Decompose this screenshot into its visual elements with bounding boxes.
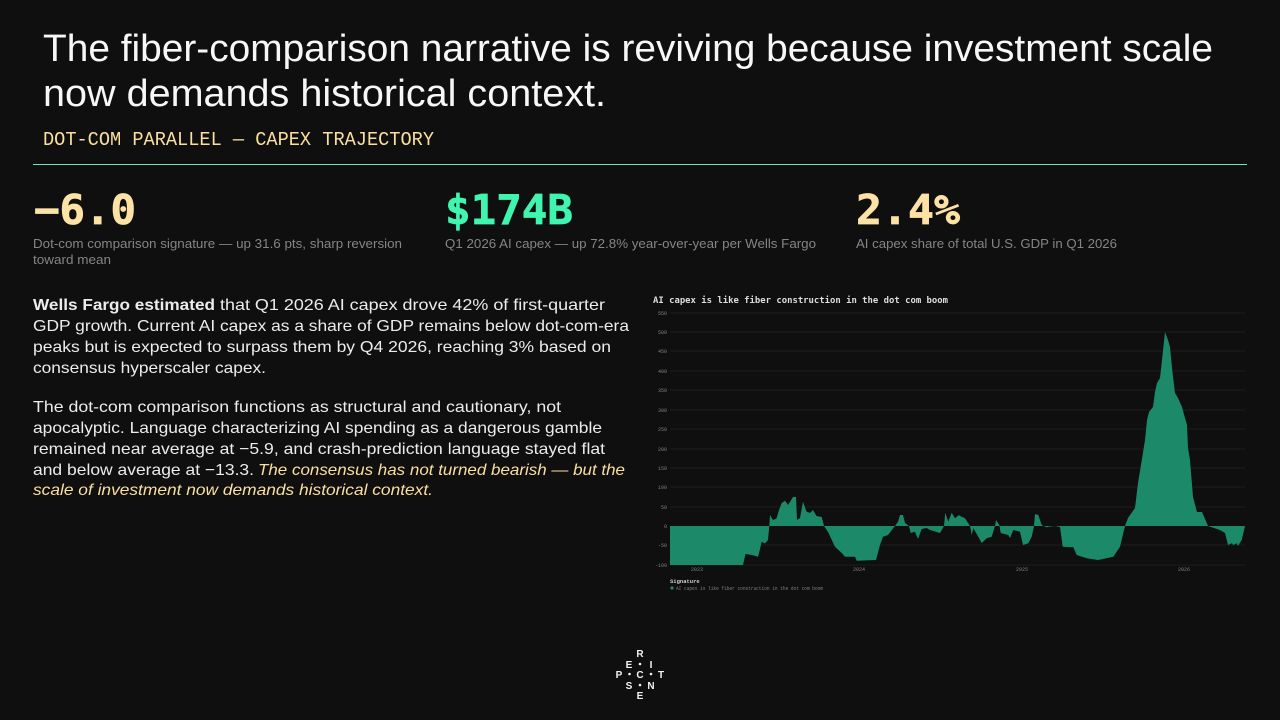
stat: AI capex [445, 186, 816, 251]
paragraph: Wells Fargo estimate [33, 297, 629, 377]
legend: Signature [670, 578, 700, 585]
paragraph: structural and cautionary: apocalyptic. Language characterizing AI spending as a dangerous gamble [33, 420, 602, 437]
stat caption [33, 237, 402, 267]
paragraph: structural and cautionary [33, 399, 625, 499]
y axis labels: 150 [658, 466, 667, 472]
logo: T [658, 670, 664, 681]
logo [616, 649, 664, 702]
logo: E [637, 691, 644, 702]
y axis labels: 350 [658, 388, 667, 394]
logo: P [616, 670, 623, 681]
y axis labels: 400 [658, 369, 667, 375]
y axis labels: 550 [658, 311, 667, 317]
subtitle: DOT-COM PARALLEL — CAPEX TRAJECTORY [43, 129, 435, 151]
paragraph: structural and cautionary: and below average at −13.3. [33, 462, 254, 479]
y axis labels [655, 311, 667, 569]
logo: E [626, 660, 633, 671]
y axis labels: -100 [655, 563, 667, 569]
logo: N [647, 681, 655, 692]
paragraph: structural and cautionary: remained near average at −5.9, and crash-prediction language stayed flat [33, 441, 606, 458]
stat caption: AI capex share of total U.S. GDP in Q1 2026 [856, 237, 1117, 251]
callout: italic conclusion: scale of investment now demands historical context. [33, 482, 433, 499]
paragraph: Wells Fargo estimate: GDP growth. Current AI capex as a share of GDP remains below dot-com-era [33, 318, 629, 335]
legend: AI capex is like fiber construction in the dot com boom [676, 586, 823, 592]
x axis labels: 2025 [1016, 567, 1028, 573]
stat caption: Q1 2026 AI capex — up 72.8% year-over-year per Wells Fargo [445, 237, 816, 251]
stat value: −6.0 [34, 186, 136, 234]
title: now demands historical context. [43, 73, 606, 115]
stat caption: toward mean [33, 253, 111, 267]
legend [670, 578, 823, 592]
logo: C [636, 670, 644, 681]
paragraph: Wells Fargo estimate: consensus hyperscaler capex. [33, 360, 266, 377]
callout: italic conclusion [33, 462, 625, 499]
x axis labels: 2024 [853, 567, 865, 573]
chart title: AI capex is like fiber construction in the dot com boom [653, 295, 949, 306]
paragraph: Wells Fargo estimate: that Q1 2026 AI capex drove 42% of first-quarter [220, 297, 606, 314]
paragraph: Wells Fargo estimate: Wells Fargo estimated [33, 297, 215, 314]
title: The fiber-comparison narrative is reviving because investment scale [43, 28, 1213, 70]
y axis labels: 300 [658, 408, 667, 414]
x axis labels: 2023 [691, 567, 703, 573]
x axis labels: 2026 [1178, 567, 1190, 573]
logo: R [636, 649, 644, 660]
y axis labels: 250 [658, 427, 667, 433]
logo: S [626, 681, 633, 692]
paragraph: structural and cautionary: The dot-com comparison functions as structural and cautionary, not [33, 399, 562, 416]
logo: I [650, 660, 653, 671]
area series [670, 332, 1245, 565]
y axis labels: 50 [661, 505, 667, 511]
chart: AI capex signature [653, 295, 1245, 592]
stat: GDP share [856, 186, 1117, 251]
y axis labels: -50 [658, 543, 667, 549]
y axis labels: 0 [664, 524, 667, 530]
x axis labels [691, 567, 1190, 573]
y axis labels: 450 [658, 349, 667, 355]
stat caption: Dot-com comparison signature — up 31.6 pts, sharp reversion [33, 237, 402, 251]
y axis labels: 500 [658, 330, 667, 336]
title [43, 28, 1213, 115]
paragraph: Wells Fargo estimate: peaks but is expected to surpass them by Q4 2026, reaching 3% based on [33, 339, 611, 356]
y axis labels: 100 [658, 485, 667, 491]
stat value: 2.4% [856, 186, 960, 234]
stat: dot-com signature [33, 186, 402, 267]
callout: italic conclusion: The consensus has not turned bearish — but the [258, 462, 625, 479]
stat value: $174B [445, 186, 573, 234]
y axis labels: 200 [658, 447, 667, 453]
